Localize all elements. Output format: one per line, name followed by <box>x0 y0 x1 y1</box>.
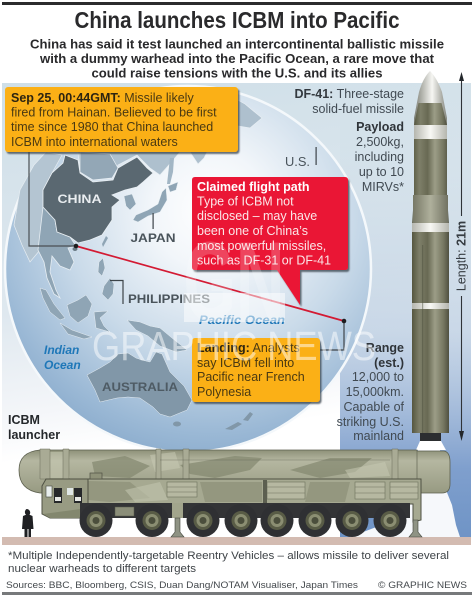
text: payload: including <box>355 150 404 164</box>
callout: launch: ICBM into international waters <box>11 135 178 149</box>
watermark <box>92 219 376 369</box>
text: payload: up to 10 <box>359 165 404 179</box>
flight path arrow line <box>74 244 346 323</box>
text: DF-41 description: DF-41: Three-stage <box>294 87 404 101</box>
label: Indian Ocean: Indian <box>44 343 79 357</box>
landing leader <box>320 321 344 350</box>
bottom rule <box>2 592 472 595</box>
callout: claimed flight path <box>192 177 348 305</box>
ground <box>2 537 471 545</box>
callout: launch: time since 1980 that China launched <box>11 120 213 134</box>
text: payload: MIRVs* <box>362 180 404 194</box>
subtitle: China has said it test launched an intercontinental ballistic missile <box>30 36 444 52</box>
label: Indian Ocean <box>44 343 81 372</box>
label: China: CHINA <box>58 192 102 206</box>
subtitle <box>30 36 444 80</box>
text: DF-41 description <box>294 87 404 116</box>
text: range: Range <box>366 341 404 355</box>
callout: landing: Landing: Analysts <box>197 341 300 355</box>
stabiliser jacks <box>171 518 422 537</box>
label: ICBM launcher <box>8 413 60 442</box>
human silhouette <box>22 509 34 537</box>
land: Taiwan <box>102 236 108 247</box>
land: Sumatra <box>40 288 65 320</box>
cab <box>42 479 88 518</box>
vehicle frame <box>87 479 421 522</box>
subtitle: could raise tensions with the U.S. and its allies <box>92 66 382 80</box>
land: Sulawesi and Java <box>60 311 110 339</box>
text: range: 15,000km. <box>346 385 404 399</box>
panel: background <box>2 83 471 537</box>
watermark: GRAPHIC NEWS <box>92 323 376 369</box>
text: payload: Payload <box>356 120 404 134</box>
callout: landing <box>192 338 320 402</box>
callout: launch: fired from Hainan. Believed to be first <box>11 106 217 120</box>
globe disc <box>5 86 371 452</box>
sources: Sources: BBC, Bloomberg, CSIS, Duan Dang/NOTAM Visualiser, Japan Times <box>6 580 358 591</box>
callout: landing: Polynesia <box>197 385 251 399</box>
label: Australia: AUSTRALIA <box>102 380 178 394</box>
land: India and central Asia <box>14 152 62 262</box>
text: range: 12,000 to <box>352 370 404 384</box>
land: Borneo <box>67 295 92 323</box>
subtitle: with a dummy warhead into the Pacific Ocean, a rare move that <box>39 51 435 66</box>
callout: landing: Pacific near French <box>197 370 305 384</box>
label: U.S.: U.S. <box>285 155 310 169</box>
land: Japan <box>133 182 178 222</box>
callout: claimed flight path: Claimed flight path <box>197 180 310 194</box>
land: Australia <box>87 352 192 417</box>
canister straps <box>40 449 398 479</box>
text: range: Capable of <box>344 400 405 414</box>
copyright: © GRAPHIC NEWS <box>378 580 467 591</box>
text: range: striking U.S. <box>337 415 404 429</box>
watermark: GN <box>184 219 284 344</box>
callout: claimed flight path: Type of ICBM not <box>197 194 294 208</box>
land: Mongolia <box>80 152 118 180</box>
land: New Guinea <box>127 320 187 352</box>
callout: landing: say ICBM fell into <box>197 356 294 370</box>
label: Indian Ocean: Ocean <box>44 358 81 372</box>
footnote: nuclear warheads to different targets <box>8 563 197 575</box>
exhaust smoke <box>350 441 460 537</box>
label: Philippines <box>110 280 210 306</box>
canister camouflage <box>92 456 372 478</box>
globe map <box>5 86 371 452</box>
land: New Zealand <box>225 412 253 430</box>
label: Japan: JAPAN <box>130 231 176 245</box>
footnote: *Multiple Independently-targetable Reentry Vehicles – allows missile to deliver several <box>8 550 449 562</box>
chassis <box>80 503 410 518</box>
launcher vehicle <box>19 449 450 537</box>
title: China launches ICBM into Pacific <box>74 7 400 33</box>
text: range: mainland <box>353 429 404 443</box>
side vents <box>167 482 418 499</box>
land: Tasmania <box>173 422 181 426</box>
callout: claimed flight path: been one of China’s <box>197 224 308 238</box>
top rule <box>2 2 472 5</box>
label: U.S. <box>285 147 317 169</box>
launch site leader <box>29 150 76 246</box>
text: payload <box>355 120 404 194</box>
land: Sakhalin <box>167 158 174 184</box>
footnote <box>8 550 449 575</box>
land: China <box>43 155 153 243</box>
land: Philippines <box>98 258 114 300</box>
label: ICBM launcher: launcher <box>8 428 60 442</box>
label: ICBM launcher: ICBM <box>8 413 40 427</box>
land: Russia and north Asia <box>60 93 262 176</box>
length dimension arrow <box>454 72 468 441</box>
callout: launch <box>5 87 238 152</box>
label: Philippines: PHILIPPINES <box>128 292 210 306</box>
label: Japan <box>130 213 176 245</box>
text: payload: 2,500kg, <box>356 135 404 149</box>
length dimension arrow: Length: 21m <box>454 221 468 291</box>
missile <box>412 71 449 450</box>
label: Pacific Ocean: Pacific Ocean <box>199 313 285 327</box>
text: range <box>337 341 405 443</box>
land: Hainan <box>72 247 78 251</box>
land: Korea <box>124 194 136 210</box>
text: range: (est.) <box>374 356 404 370</box>
missile canister <box>19 450 450 493</box>
land: Indochina <box>38 207 76 298</box>
callout: claimed flight path: most powerful missiles, <box>197 239 326 253</box>
callout: launch: Sep 25, 00:44GMT: Missile likely <box>11 91 194 105</box>
text: DF-41 description: solid-fuel missile <box>312 102 404 116</box>
roof vents <box>90 473 102 479</box>
callout: claimed flight path: disclosed – may have <box>197 209 317 223</box>
cab windows <box>46 486 82 503</box>
callout: claimed flight path: such as DF-31 or DF-41 <box>197 254 331 268</box>
wheels <box>80 504 406 537</box>
